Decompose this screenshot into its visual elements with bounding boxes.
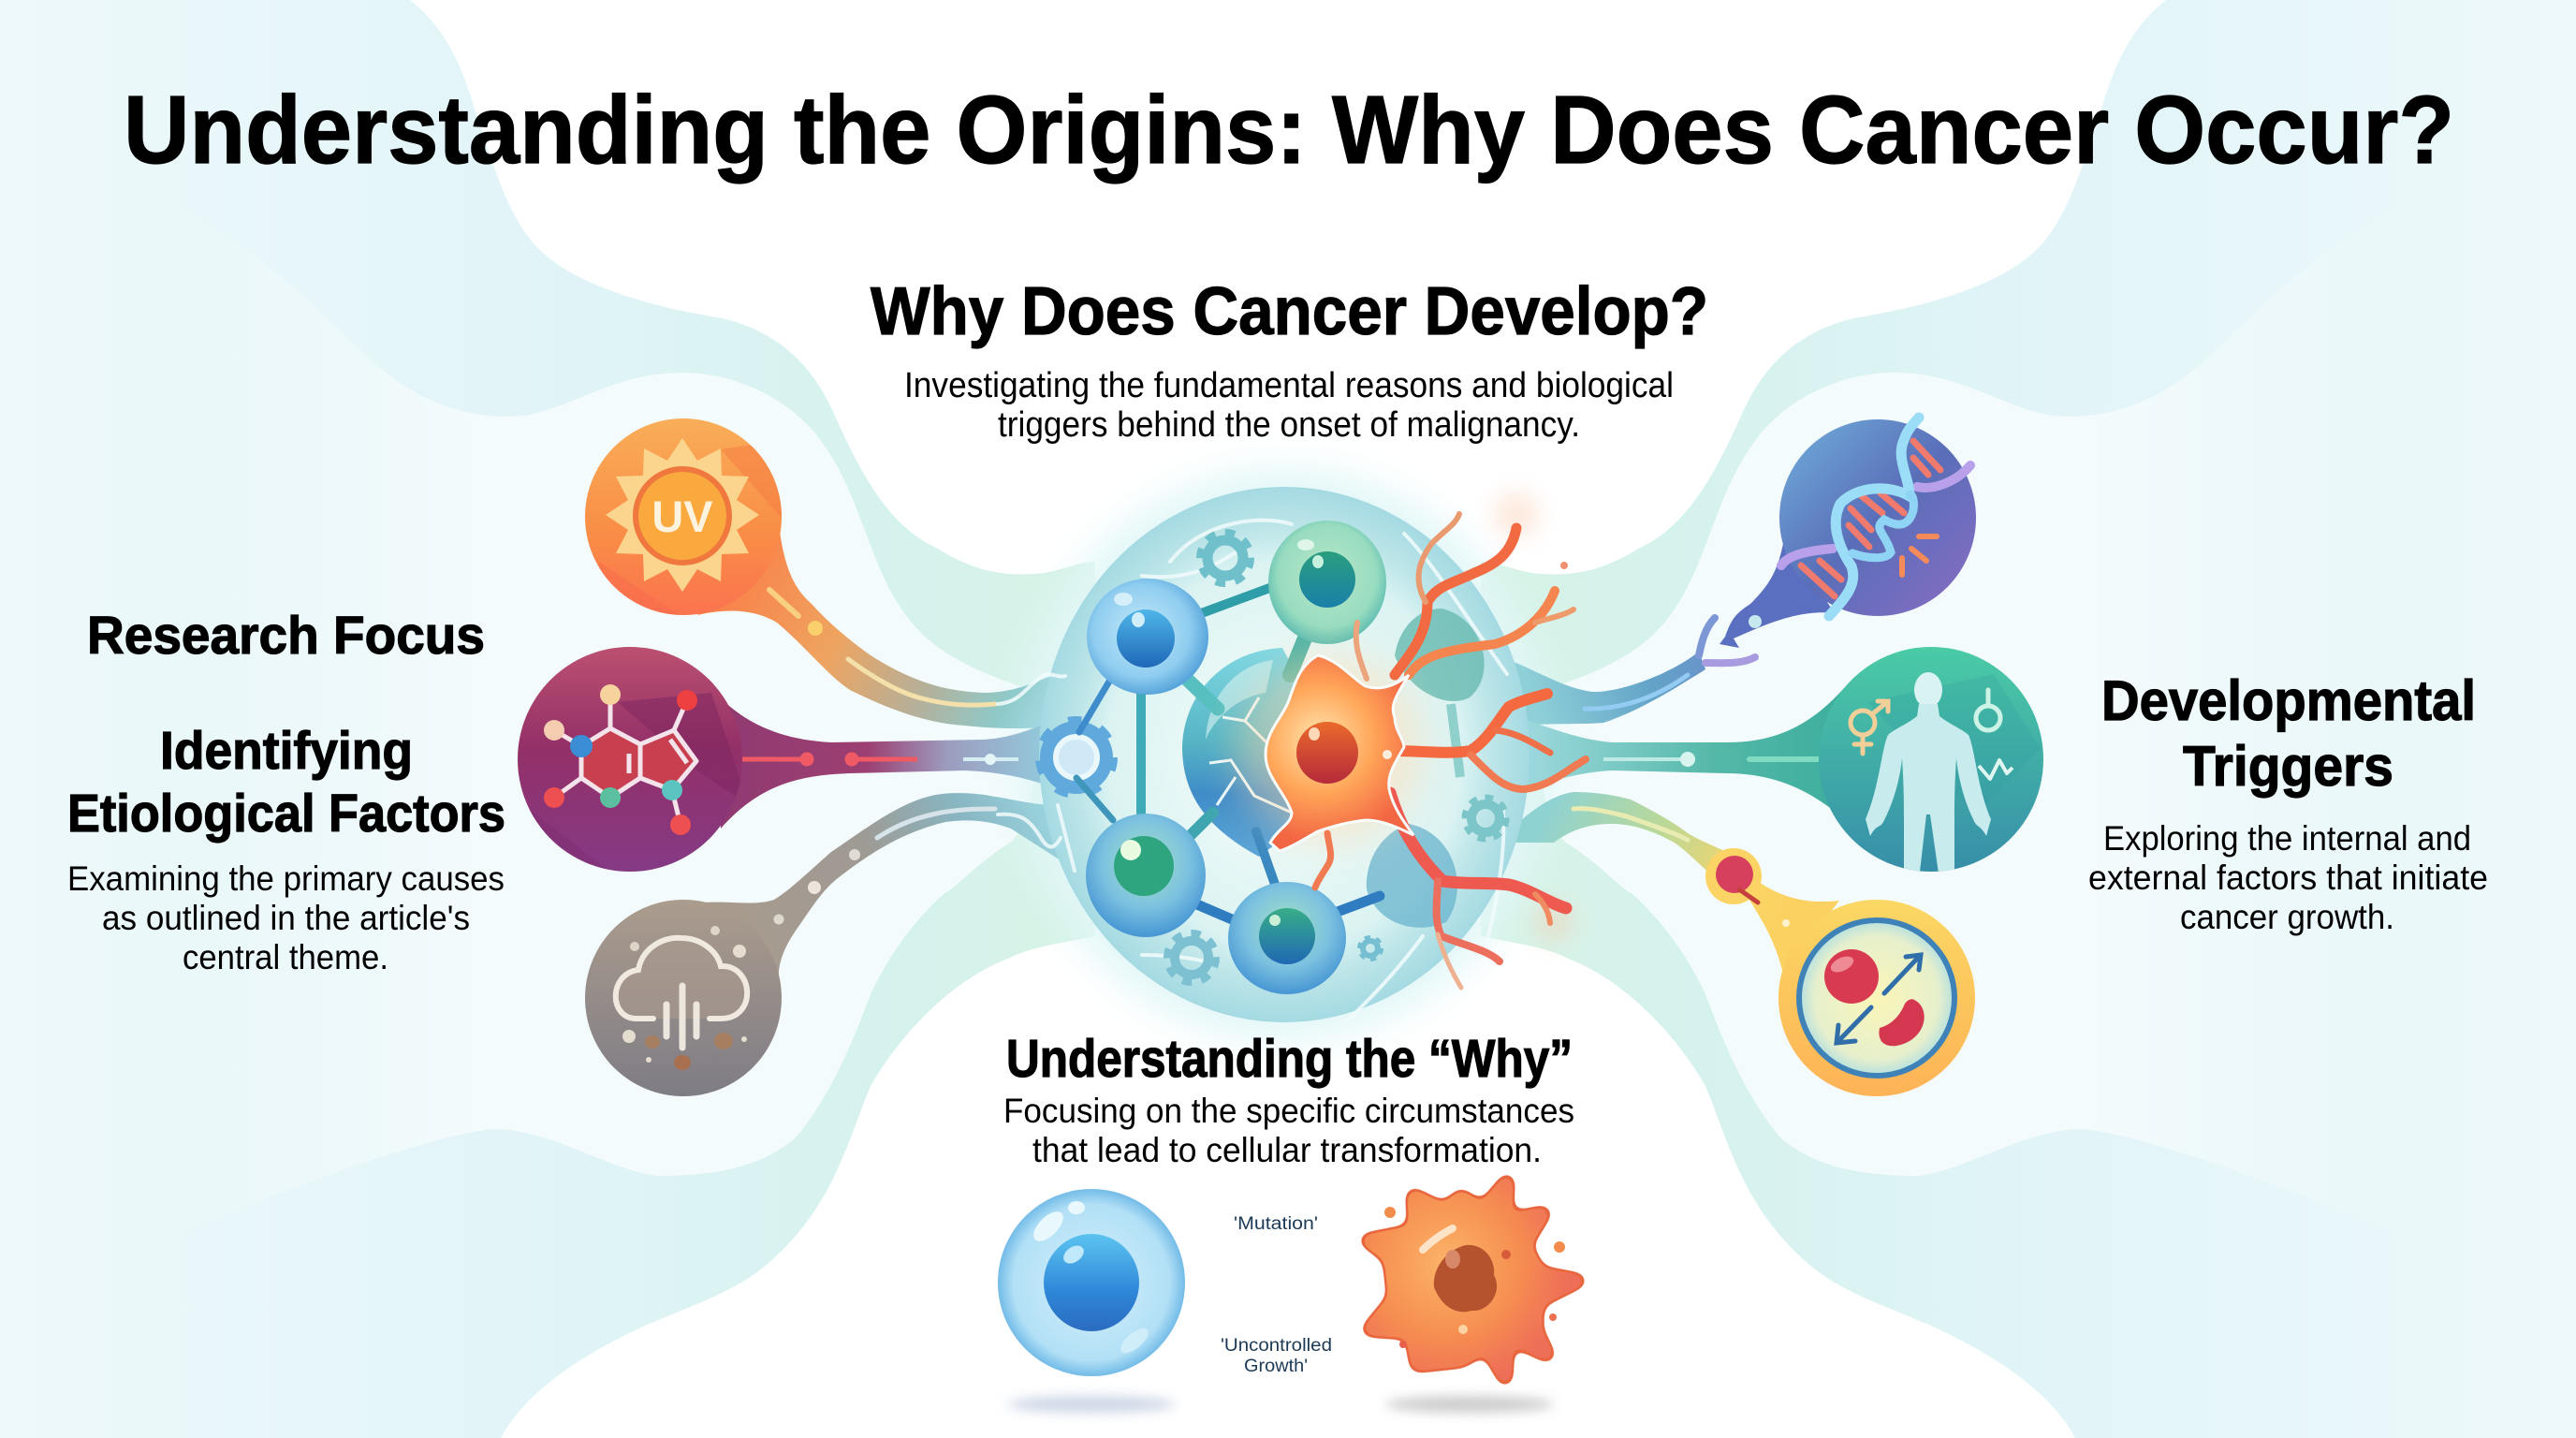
right teal cells <box>1367 609 1485 928</box>
stream: DNA to centre <box>1498 538 1835 730</box>
cell: blue-green bottom <box>1228 882 1346 994</box>
icon: pollution cloud <box>585 900 782 1096</box>
cancer nucleus <box>1296 722 1358 784</box>
description <box>67 859 505 976</box>
stream: blood cells to centre <box>1498 792 1839 974</box>
icon: blood cells <box>1778 900 1975 1096</box>
connecting stems <box>1076 583 1380 919</box>
stream: UV to centre <box>697 524 1076 728</box>
stream: hormones to centre <box>1498 688 1844 819</box>
gear: left hub <box>1043 724 1110 791</box>
description <box>1003 1092 1574 1169</box>
cell: green top <box>1268 521 1386 644</box>
sphere glow <box>1017 469 1551 1040</box>
description: Exploring the internal and <box>2103 819 2471 858</box>
description: external factors that initiate <box>2088 858 2488 897</box>
heading: identifying etiological factors <box>67 721 505 844</box>
sphere flow lines <box>998 521 1507 1020</box>
description <box>904 366 1674 445</box>
heading: Why Does Cancer Develop? <box>871 274 1708 349</box>
background: right inner pale panel <box>1541 140 2576 1311</box>
sphere body <box>1039 487 1530 1022</box>
gear: right <box>1465 798 1506 839</box>
description: Focusing on the specific circumstances <box>1003 1092 1574 1130</box>
heading: Developmental <box>2101 669 2476 732</box>
label: uncontrolled growth: Growth' <box>1244 1357 1308 1376</box>
description: central theme. <box>183 938 388 976</box>
title: Understanding the Origins: Why Does Cancer Occur? <box>124 76 2454 183</box>
label: uncontrolled growth <box>1221 1336 1332 1376</box>
cancer glows <box>1236 492 1574 943</box>
gear: top <box>1200 533 1251 583</box>
icon: DNA <box>1779 418 1976 616</box>
icon: human body with hormone symbols <box>1819 647 2043 880</box>
stream: pollution to centre <box>702 793 1076 981</box>
icon: UV sun <box>585 418 782 615</box>
cancer cell <box>1236 492 1586 988</box>
gear: small <box>1359 937 1382 960</box>
central large cell <box>1182 648 1301 857</box>
icon: chemical molecule <box>518 647 749 880</box>
heading: research focus: Research Focus <box>87 606 485 666</box>
background: right wave band <box>1481 0 2576 1438</box>
label: uncontrolled growth: 'Uncontrolled <box>1221 1336 1332 1356</box>
symbol: pulse <box>1979 760 2012 779</box>
symbol: gender <box>1851 701 1888 754</box>
description: cancer growth. <box>2180 898 2394 936</box>
heading <box>2101 669 2476 798</box>
background: left inner pale panel <box>0 140 1035 1311</box>
right text block: developmental triggers <box>2088 669 2488 936</box>
central sphere with cells <box>998 487 1586 1022</box>
bottom text block: understanding the why <box>1003 1029 1574 1169</box>
label: UV: UV <box>651 492 713 541</box>
diagram: cancer cell <box>1368 1181 1578 1413</box>
description: Examining the primary causes <box>67 859 505 898</box>
description: that lead to cellular transformation. <box>1032 1131 1542 1169</box>
background: left wave band <box>0 0 1095 1438</box>
description: triggers behind the onset of malignancy. <box>998 405 1580 445</box>
blob fill <box>1368 1181 1578 1378</box>
left text block: research focus <box>67 606 505 976</box>
cancer body <box>1266 655 1413 851</box>
description <box>2088 819 2488 936</box>
symbol: hormone ring <box>1976 690 2000 730</box>
gear: bottom <box>1167 933 1216 982</box>
diagram: normal cell <box>998 1189 1185 1413</box>
description: as outlined in the article's <box>102 899 470 937</box>
stream: chemical to centre <box>711 688 1076 829</box>
label: mutation: 'Mutation' <box>1234 1214 1318 1234</box>
cancer branches <box>1315 514 1586 988</box>
heading: identifying etiological factors: Etiological Factors <box>67 784 505 844</box>
description: Investigating the fundamental reasons and biological <box>904 366 1674 405</box>
blob outline <box>1368 1181 1578 1378</box>
heading: identifying etiological factors: Identifying <box>160 721 413 781</box>
top text block: why does cancer develop <box>871 274 1708 445</box>
cell: blue top left <box>1087 579 1208 695</box>
heading: Triggers <box>2183 735 2393 798</box>
heading: Understanding the “Why” <box>1006 1029 1573 1089</box>
cell: blue-green lower left <box>1086 814 1206 937</box>
